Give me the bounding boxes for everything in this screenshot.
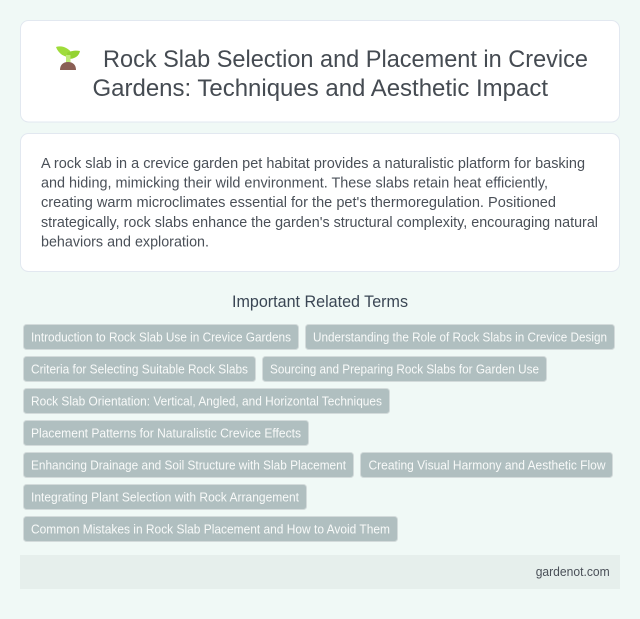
tag list: related terms bbox=[24, 324, 614, 542]
tag bbox=[24, 516, 398, 542]
text block: description bbox=[41, 156, 598, 250]
text block: description: A rock slab in a crevice garden pet habitat provides a naturalistic platform for basking bbox=[41, 156, 585, 172]
title: Gardens: Techniques and Aesthetic Impact bbox=[92, 75, 548, 102]
tag bbox=[24, 388, 390, 414]
title: Rock Slab Selection and Placement in Crevice bbox=[103, 46, 588, 73]
tag bbox=[360, 452, 612, 478]
title bbox=[92, 46, 588, 102]
tag: Introduction to Rock Slab Use in Crevice Gardens bbox=[31, 329, 291, 344]
tag: Integrating Plant Selection with Rock Arrangement bbox=[31, 489, 299, 504]
tag: Creating Visual Harmony and Aesthetic Flow bbox=[368, 457, 606, 472]
tag bbox=[24, 420, 308, 446]
tag bbox=[24, 452, 354, 478]
tag: Common Mistakes in Rock Slab Placement and How to Avoid Them bbox=[31, 521, 390, 536]
tag bbox=[306, 324, 614, 350]
tag: Enhancing Drainage and Soil Structure with Slab Placement bbox=[31, 457, 346, 472]
text block: description: strategically, rock slabs enhance the garden's structural complexity, encouraging natural bbox=[41, 215, 598, 231]
panel: title card bbox=[20, 20, 620, 122]
tag bbox=[24, 356, 256, 382]
panel: description card bbox=[20, 134, 620, 272]
tag bbox=[24, 484, 306, 510]
footer text: gardenot.com bbox=[536, 564, 610, 579]
icon: seedling bbox=[56, 46, 80, 70]
tag: Rock Slab Orientation: Vertical, Angled, and Horizontal Techniques bbox=[31, 393, 382, 408]
heading: related terms: Important Related Terms bbox=[232, 293, 408, 311]
text block: description: creating warm microclimates essential for the pet's thermoregulation. Positioned bbox=[41, 195, 556, 211]
footer bar bbox=[20, 555, 620, 589]
text block: description: and hiding, mimicking their wild environment. These slabs retain heat efficiently, bbox=[41, 176, 548, 192]
tag: Sourcing and Preparing Rock Slabs for Garden Use bbox=[270, 361, 539, 376]
tag: Placement Patterns for Naturalistic Crevice Effects bbox=[31, 425, 301, 440]
text block: description: behaviors and exploration. bbox=[41, 234, 209, 250]
tag: Understanding the Role of Rock Slabs in Crevice Design bbox=[313, 329, 607, 344]
tag: Criteria for Selecting Suitable Rock Slabs bbox=[31, 361, 248, 376]
tag bbox=[262, 356, 546, 382]
tag bbox=[24, 324, 298, 350]
